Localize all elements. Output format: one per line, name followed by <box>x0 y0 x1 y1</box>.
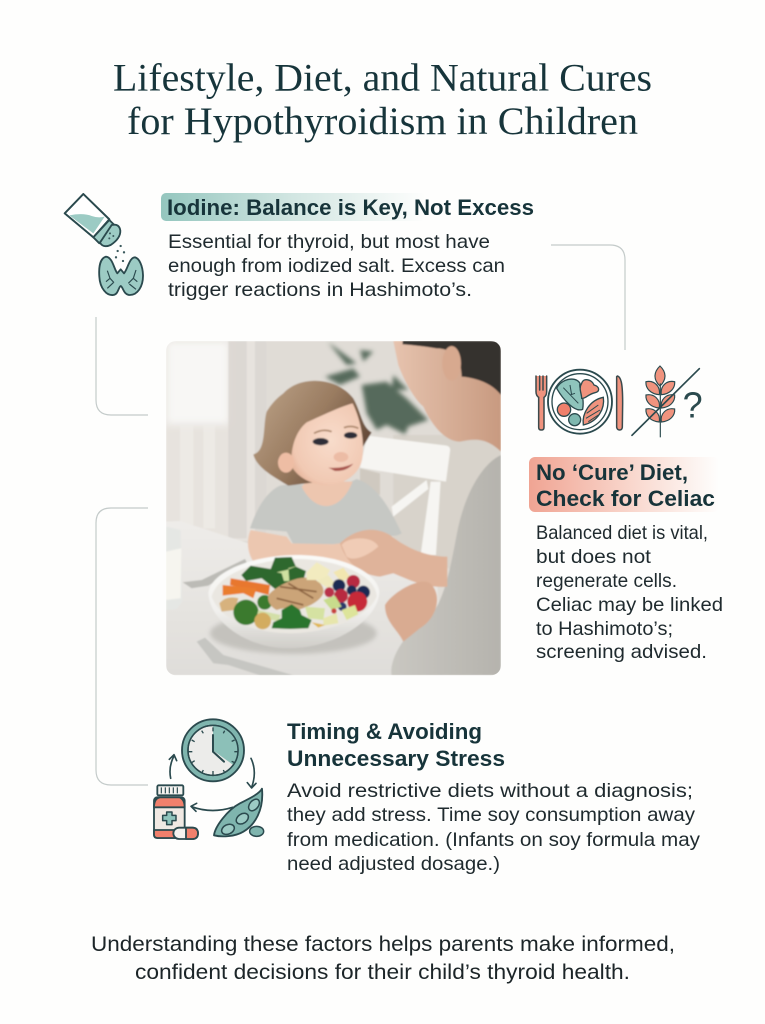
text: timing: Avoid restrictive diets without a diagnosis; <box>287 780 693 802</box>
salt grains <box>108 232 125 262</box>
footer text <box>91 932 675 984</box>
eyes and mouth <box>313 438 329 445</box>
icon: salt shaker over thyroid <box>65 194 143 295</box>
room background <box>242 341 450 602</box>
title <box>113 56 652 143</box>
text: iodine: Essential for thyroid, but most have <box>168 231 490 253</box>
fork <box>536 376 547 430</box>
footer text: Understanding these factors helps parents make informed, <box>91 932 675 956</box>
text: no cure diet: to Hashimoto’s; <box>536 618 673 640</box>
title: Lifestyle, Diet, and Natural Cures <box>113 56 652 100</box>
title: for Hypothyroidism in Children <box>127 100 638 143</box>
photo: child and parent at table with healthy bowl <box>166 341 501 675</box>
text: timing: they add stress. Time soy consumption away <box>287 804 695 826</box>
connector: iodine to diet <box>551 245 625 350</box>
text: no cure diet: but does not <box>536 546 652 568</box>
child hair back <box>253 381 372 486</box>
heading: no cure diet: Check for Celiac <box>536 486 715 511</box>
heading: iodine: Iodine: Balance is Key, Not Excess <box>167 195 534 220</box>
text: timing: from medication. (Infants on soy formula may <box>287 829 700 851</box>
knife <box>617 376 623 430</box>
heading: timing: Timing & Avoiding <box>287 719 482 744</box>
medicine bottle <box>154 785 198 839</box>
heading: timing: Unnecessary Stress <box>287 746 505 771</box>
table <box>166 522 438 624</box>
cycle arrows <box>169 755 256 811</box>
glass of milk <box>166 528 181 600</box>
text: no cure diet: regenerate cells. <box>536 570 677 592</box>
text: no cure diet <box>536 522 723 663</box>
text: timing: need adjusted dosage.) <box>287 853 500 875</box>
child arms <box>248 530 354 566</box>
curtain <box>166 341 266 541</box>
soybean pod <box>214 789 264 836</box>
spoon <box>183 559 247 588</box>
text: iodine: enough from iodized salt. Excess can <box>168 255 505 277</box>
chair <box>360 436 450 555</box>
child face <box>291 403 363 485</box>
heading: no cure diet <box>529 457 719 512</box>
parent sweater <box>391 455 501 675</box>
text: iodine: trigger reactions in Hashimoto’s. <box>168 279 472 301</box>
parent arm and hand <box>340 530 447 587</box>
clock <box>182 719 244 781</box>
plate <box>548 370 612 434</box>
wheat <box>646 366 675 437</box>
connector: timing to photo <box>96 508 148 785</box>
connector: iodine to photo <box>96 317 148 415</box>
child shirt <box>250 479 402 544</box>
text: no cure diet: screening advised. <box>536 641 707 663</box>
bowl shadow <box>209 622 378 656</box>
plant <box>325 342 428 434</box>
thyroid gland <box>99 257 143 295</box>
shaker body <box>65 194 120 246</box>
parent head <box>393 341 501 452</box>
text: iodine <box>168 231 505 301</box>
heading: no cure diet: No ‘Cure’ Diet, <box>536 460 688 485</box>
fork <box>197 638 293 675</box>
text: timing <box>287 780 700 875</box>
heading: timing <box>287 719 505 771</box>
icons: plate with fork and knife, crossed-out wheat <box>536 366 703 437</box>
child ear <box>278 453 294 473</box>
bowl food <box>219 557 370 629</box>
text: no cure diet: Celiac may be linked <box>536 594 723 616</box>
question mark: ? <box>683 384 703 425</box>
footer text: confident decisions for their child’s thyroid health. <box>135 960 630 984</box>
text: no cure diet: Balanced diet is vital, <box>536 522 708 544</box>
bowl <box>208 555 379 648</box>
icon: clock, soy and medication cycle <box>154 719 264 839</box>
